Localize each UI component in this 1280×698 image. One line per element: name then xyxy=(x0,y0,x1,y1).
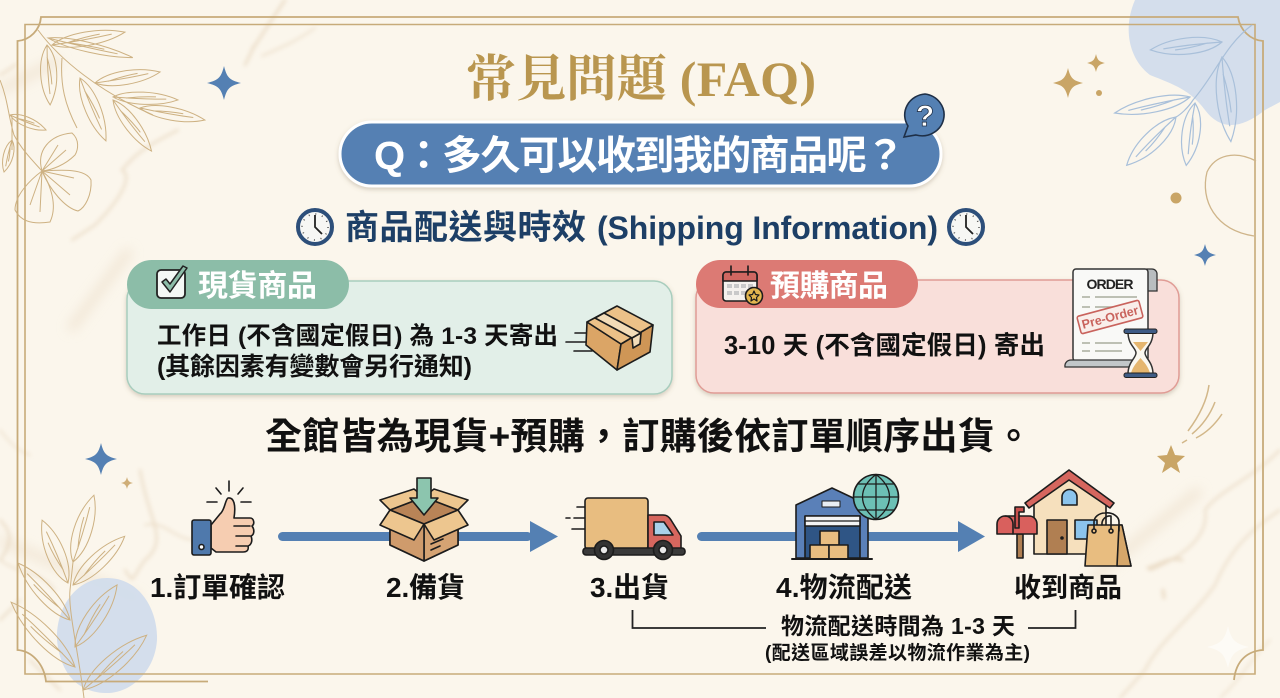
question pill xyxy=(340,122,941,186)
icon: house with mailbox and bag xyxy=(997,470,1131,566)
icon: calendar xyxy=(723,266,762,304)
subheading xyxy=(345,209,938,247)
step label: goods received: 收到商品 xyxy=(1014,573,1122,603)
icon: order document and hourglass xyxy=(1065,269,1157,378)
panel: in-stock goods xyxy=(127,260,672,394)
icon: parcel box xyxy=(566,306,653,370)
text: logistics duration: 物流配送時間為 1-3 天 xyxy=(781,613,1015,639)
icon: order document and hourglass: Pre-Order xyxy=(1080,303,1140,332)
sparkles and stars xyxy=(85,54,1249,668)
arrow: ship to receive xyxy=(697,521,985,552)
gold leaves top left xyxy=(0,25,206,223)
text: pre-order shipping time: 3-10 天 (不含國定假日) 寄出 xyxy=(724,332,1045,360)
text: in-stock note: (其餘因素有變數會另行通知) xyxy=(157,352,472,381)
panel: pre-order goods xyxy=(696,260,1179,393)
arrow: confirm to ship xyxy=(278,521,558,552)
icon: clock left xyxy=(298,210,332,244)
icon: open box with arrow xyxy=(380,478,468,561)
key statement: 全館皆為現貨+預購，訂購後依訂單順序出貨。 xyxy=(265,416,1032,457)
tab: in-stock heading: 現貨商品 xyxy=(198,270,317,303)
text: logistics note: (配送區域誤差以物流作業為主) xyxy=(765,642,1030,664)
title: 常見問題 (FAQ) xyxy=(466,51,816,107)
gold curve right xyxy=(1205,155,1256,236)
step label: ship out: 3.出貨 xyxy=(590,572,669,603)
icon: warehouse and globe xyxy=(792,474,898,559)
icon: clock right xyxy=(949,210,983,244)
gold leaves bottom left xyxy=(5,492,152,698)
icon: thumbs up xyxy=(192,481,254,555)
icon: order document and hourglass: ORDER xyxy=(1086,276,1134,292)
icon: question bubble: ? xyxy=(916,100,934,133)
text: in-stock shipping time: 工作日 (不含國定假日) 為 1-3 天寄出 xyxy=(157,322,558,350)
step label: prepare goods: 2.備貨 xyxy=(386,572,465,603)
tab: pre-order heading: 預購商品 xyxy=(770,270,888,303)
icon: delivery truck xyxy=(566,498,685,560)
step label: logistics delivery: 4.物流配送 xyxy=(776,572,912,603)
icon: checkbox xyxy=(157,266,187,298)
icon: question bubble xyxy=(904,94,944,137)
subheading: 商品配送與時效 xyxy=(345,209,586,247)
tab: pre-order heading xyxy=(696,260,918,308)
blue leaves top right xyxy=(1113,25,1252,172)
question pill: Q：多久可以收到我的商品呢？ xyxy=(374,134,905,178)
tab: in-stock heading xyxy=(127,260,349,309)
bracket: logistics time span xyxy=(632,610,1076,628)
subheading: (Shipping Information) xyxy=(597,210,938,246)
step label: order confirmed: 1.訂單確認 xyxy=(150,572,285,603)
